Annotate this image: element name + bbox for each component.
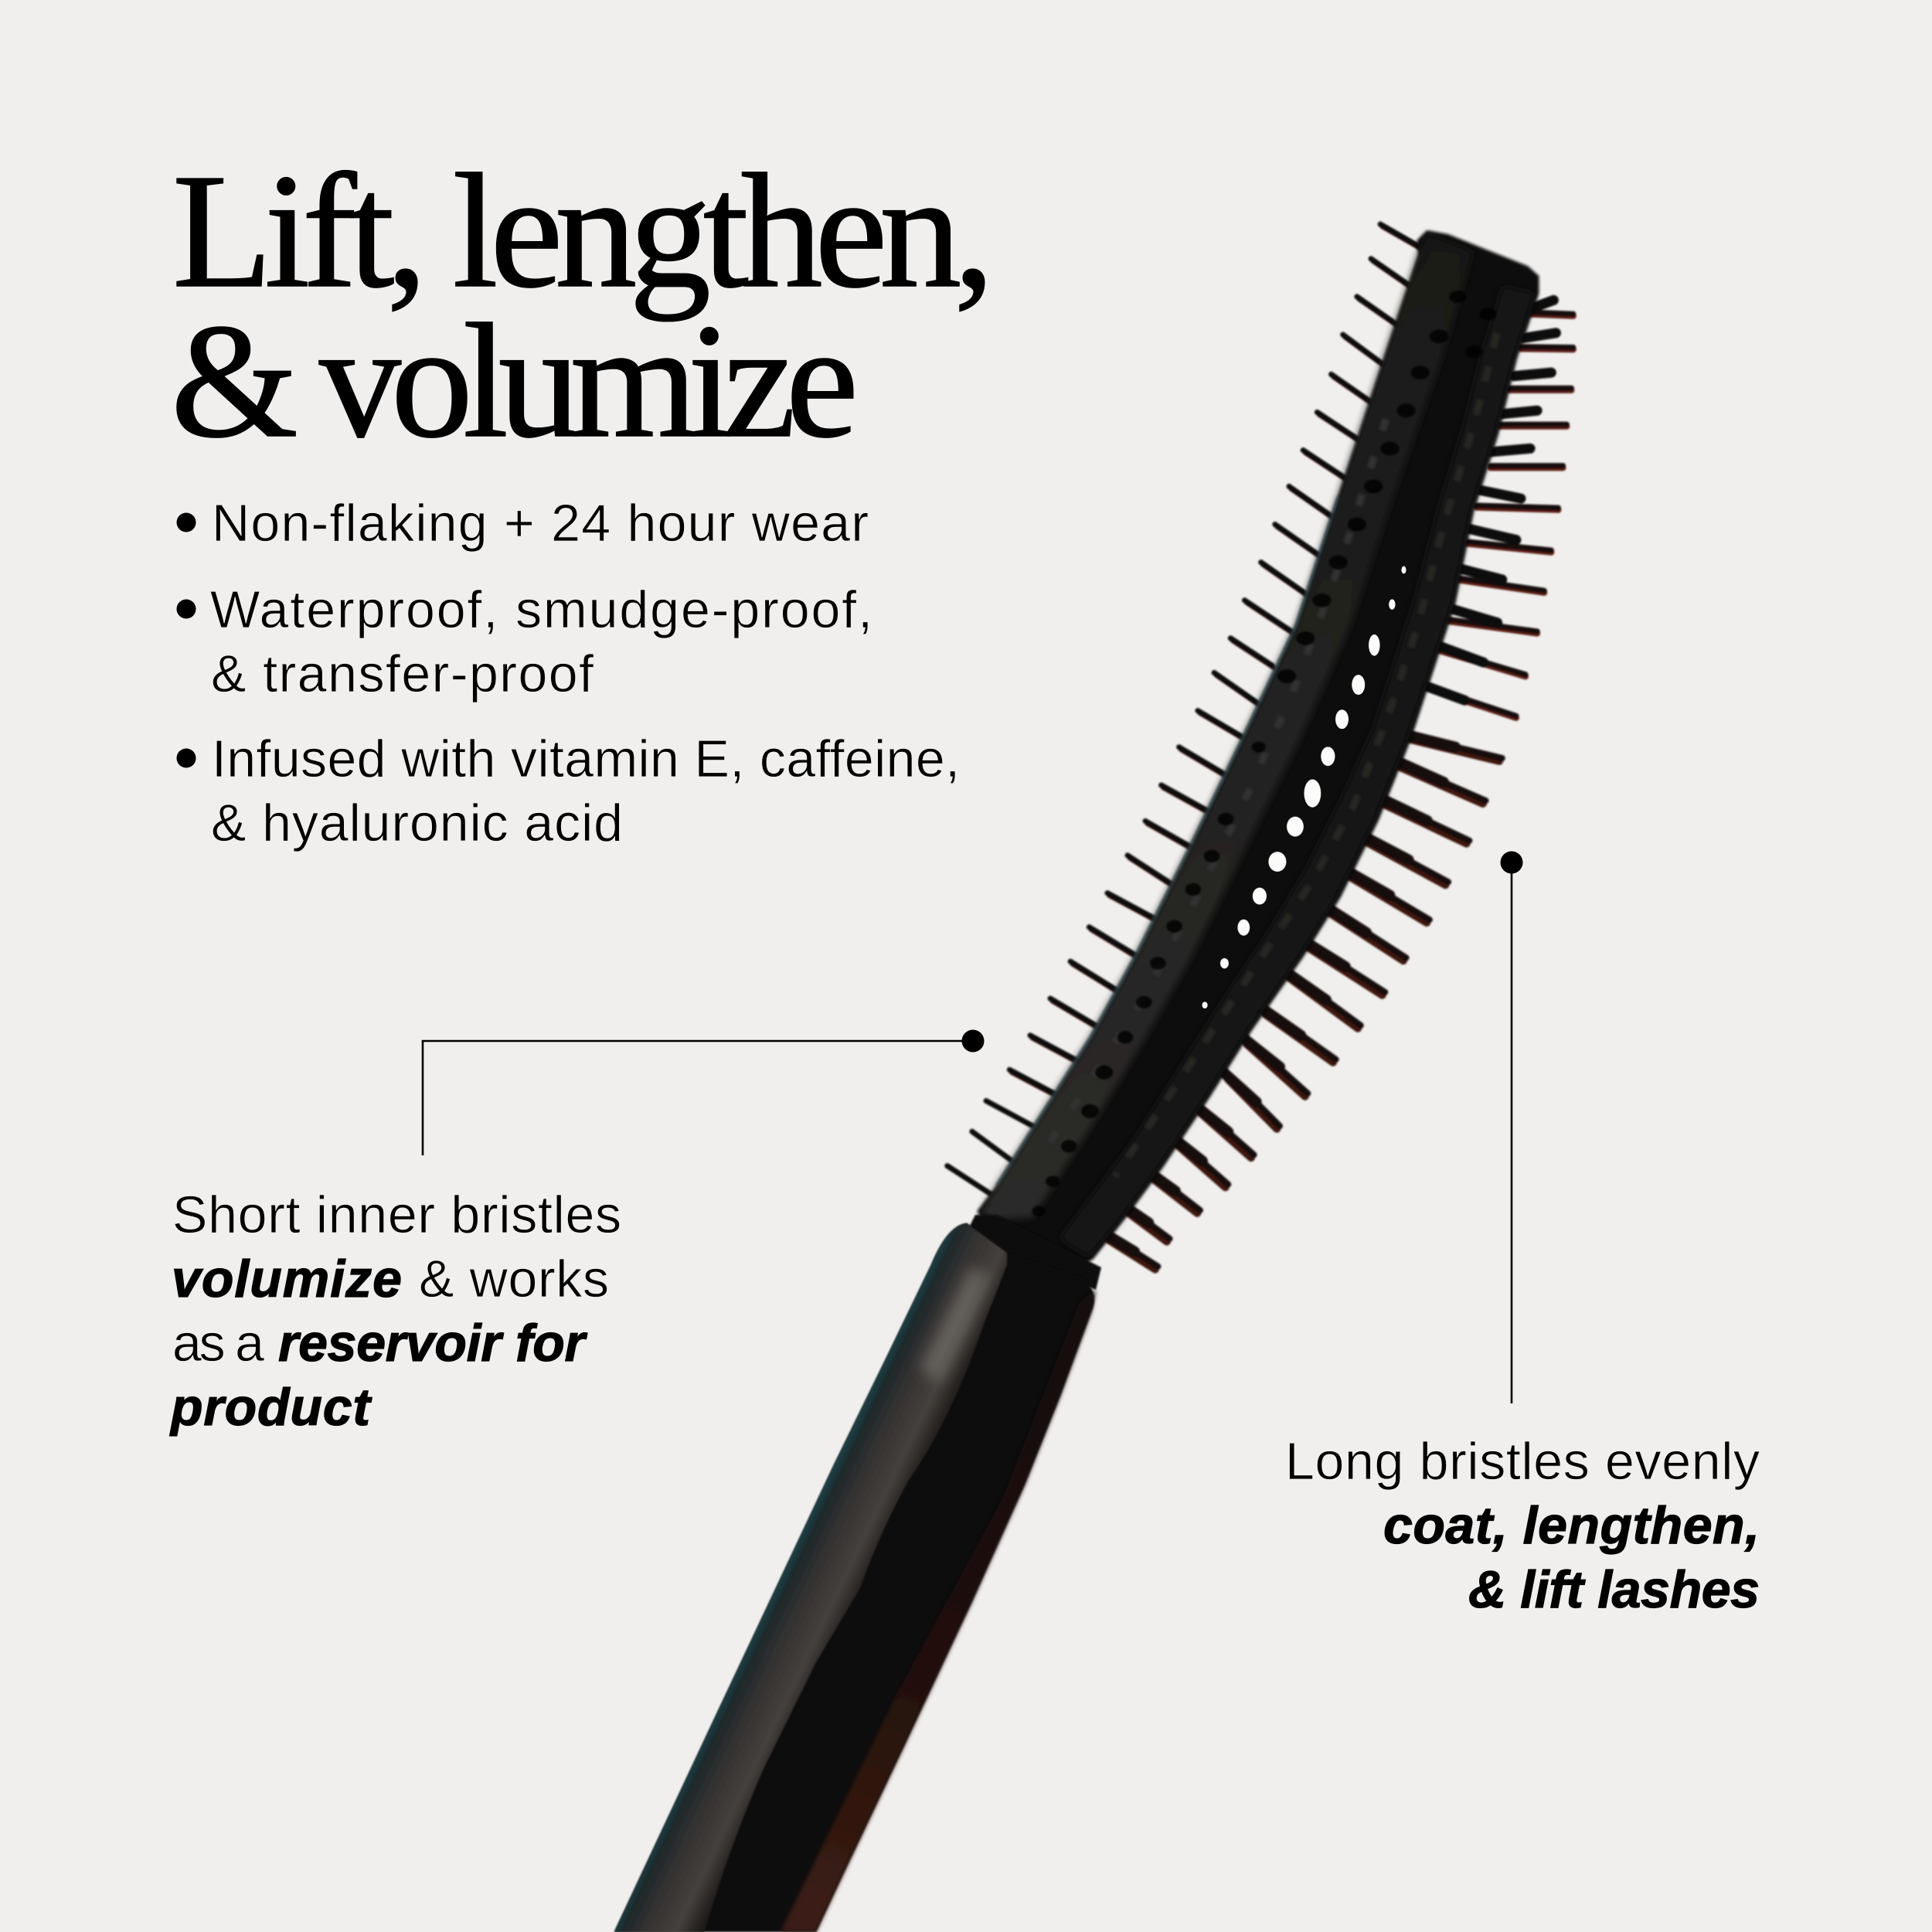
callout: long bristles [1285, 852, 1760, 1619]
handle left highlight band [614, 1223, 1007, 1932]
handle [614, 1223, 1096, 1932]
core right strip [1060, 286, 1534, 1257]
title [171, 140, 995, 471]
title: Lift, lengthen, [172, 140, 995, 321]
bullet: waterproof [176, 580, 872, 703]
leader dot [961, 1029, 985, 1053]
callout text [169, 1185, 621, 1437]
bullet: waterproof: & transfer-proof [211, 645, 594, 703]
mascara wand illustration [614, 224, 1573, 1932]
collar [968, 1215, 1101, 1290]
callout text: reservoir for [278, 1314, 588, 1372]
core mottling [1035, 332, 1497, 1177]
handle body [614, 1223, 1094, 1932]
bullet: infused: & hyaluronic acid [211, 794, 623, 852]
callout text: & lift lashes [1468, 1560, 1760, 1619]
core surface dots [1032, 291, 1496, 1216]
leader line [423, 1041, 973, 1155]
callout text: product [169, 1378, 372, 1437]
bullet: non-flaking: Non-flaking + 24 hour wear [212, 494, 869, 553]
callout text: coat, lengthen, [1383, 1496, 1760, 1555]
callout text: volumize [172, 1250, 402, 1308]
callout text [1285, 1432, 1760, 1619]
bullet: infused [176, 730, 960, 852]
callout text: Short inner bristles [172, 1185, 621, 1244]
leader line [1511, 862, 1512, 1403]
bullet: waterproof: Waterproof, smudge-proof, [210, 580, 872, 639]
core lighter left band [982, 234, 1472, 1219]
callout text: & works [419, 1250, 609, 1308]
title: & volumize [171, 290, 859, 471]
leader dot [1501, 852, 1522, 873]
callout text: Long bristles evenly [1285, 1432, 1760, 1491]
callout: short inner bristles [169, 1029, 985, 1437]
bullet: infused: Infused with vitamin E, caffeine, [212, 730, 960, 788]
handle right reflection [781, 1290, 1096, 1932]
core holes [1202, 566, 1406, 1009]
bristles [947, 224, 1573, 1270]
teal edge [997, 497, 1338, 1185]
feature bullet list [176, 494, 960, 852]
handle top gloss [920, 1267, 989, 1383]
brush core [977, 230, 1539, 1269]
callout text: as a [172, 1314, 264, 1372]
